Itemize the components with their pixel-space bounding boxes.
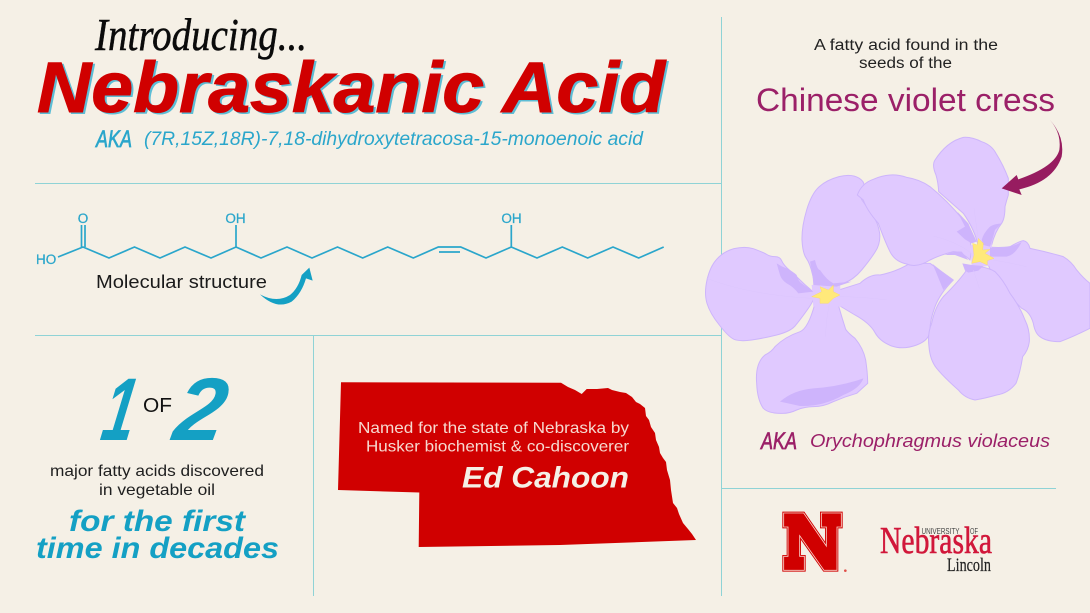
stat: 1 of 2 — [96, 361, 235, 460]
heading: Chinese violet cress: Chinese violet cress — [756, 82, 1055, 118]
arrow: flower — [1002, 120, 1062, 195]
logo: University of Nebraska Lincoln: Lincoln — [947, 555, 991, 576]
arrow: molecular structure — [260, 268, 313, 305]
title: Nebraskanic Acid: Nebraskanic Acid — [39, 50, 669, 130]
subtitle: chemical name: AKA — [95, 126, 132, 153]
chart: molecular structure: HO — [36, 252, 56, 267]
text: fatty acid found: A fatty acid found in the — [814, 37, 998, 54]
text: for the first time in decades: for the first — [69, 505, 247, 538]
text: major fatty acids — [50, 463, 264, 499]
text: named for Nebraska: Named for the state of Nebraska by — [358, 420, 629, 437]
chart: molecular structure: O — [78, 211, 88, 226]
text: for the first time in decades — [36, 505, 279, 565]
text: major fatty acids: in vegetable oil — [99, 482, 215, 499]
caption: Orychophragmus violaceus — [760, 428, 1050, 455]
title: Nebraskanic Acid: Nebraskanic Acid — [37, 49, 667, 128]
logo: Nebraska N — [782, 512, 847, 572]
name: Ed Cahoon: Ed Cahoon — [462, 462, 629, 494]
heading: Introducing: Introducing... — [94, 9, 307, 60]
logo: University of Nebraska Lincoln: Nebraska — [880, 520, 992, 562]
text: for the first time in decades: time in decades — [36, 532, 279, 565]
text: named for Nebraska: Husker biochemist & co-discoverer — [366, 438, 630, 456]
logo: University of Nebraska Lincoln: OF — [970, 526, 978, 536]
text: fatty acid found: seeds of the — [859, 55, 952, 72]
label: Molecular structure: Molecular structure — [96, 272, 267, 292]
stat: 1 of 2: OF — [143, 395, 172, 417]
chart: molecular structure: OH — [225, 211, 246, 226]
caption: Orychophragmus violaceus: AKA — [760, 428, 797, 455]
caption: Orychophragmus violaceus: Orychophragmus violaceus — [810, 431, 1050, 451]
logo: University of Nebraska Lincoln — [880, 520, 992, 576]
text: named for Nebraska — [358, 420, 630, 456]
chart: molecular structure: OH — [501, 211, 522, 226]
logo: University of Nebraska Lincoln: UNIVERSITY — [922, 526, 960, 536]
subtitle: chemical name: (7R,15Z,18R)-7,18-dihydroxytetracosa-15-monoenoic acid — [144, 129, 644, 150]
stat: 1 of 2: 2 — [165, 361, 235, 460]
chart: molecular structure — [36, 211, 664, 267]
map: Nebraska — [338, 382, 696, 547]
stat: 1 of 2: 1 — [96, 361, 145, 460]
text: fatty acid found — [814, 37, 998, 72]
text: major fatty acids: major fatty acids discovered — [50, 463, 264, 480]
illustration: flowers — [705, 137, 1090, 413]
subtitle: chemical name — [95, 126, 644, 153]
